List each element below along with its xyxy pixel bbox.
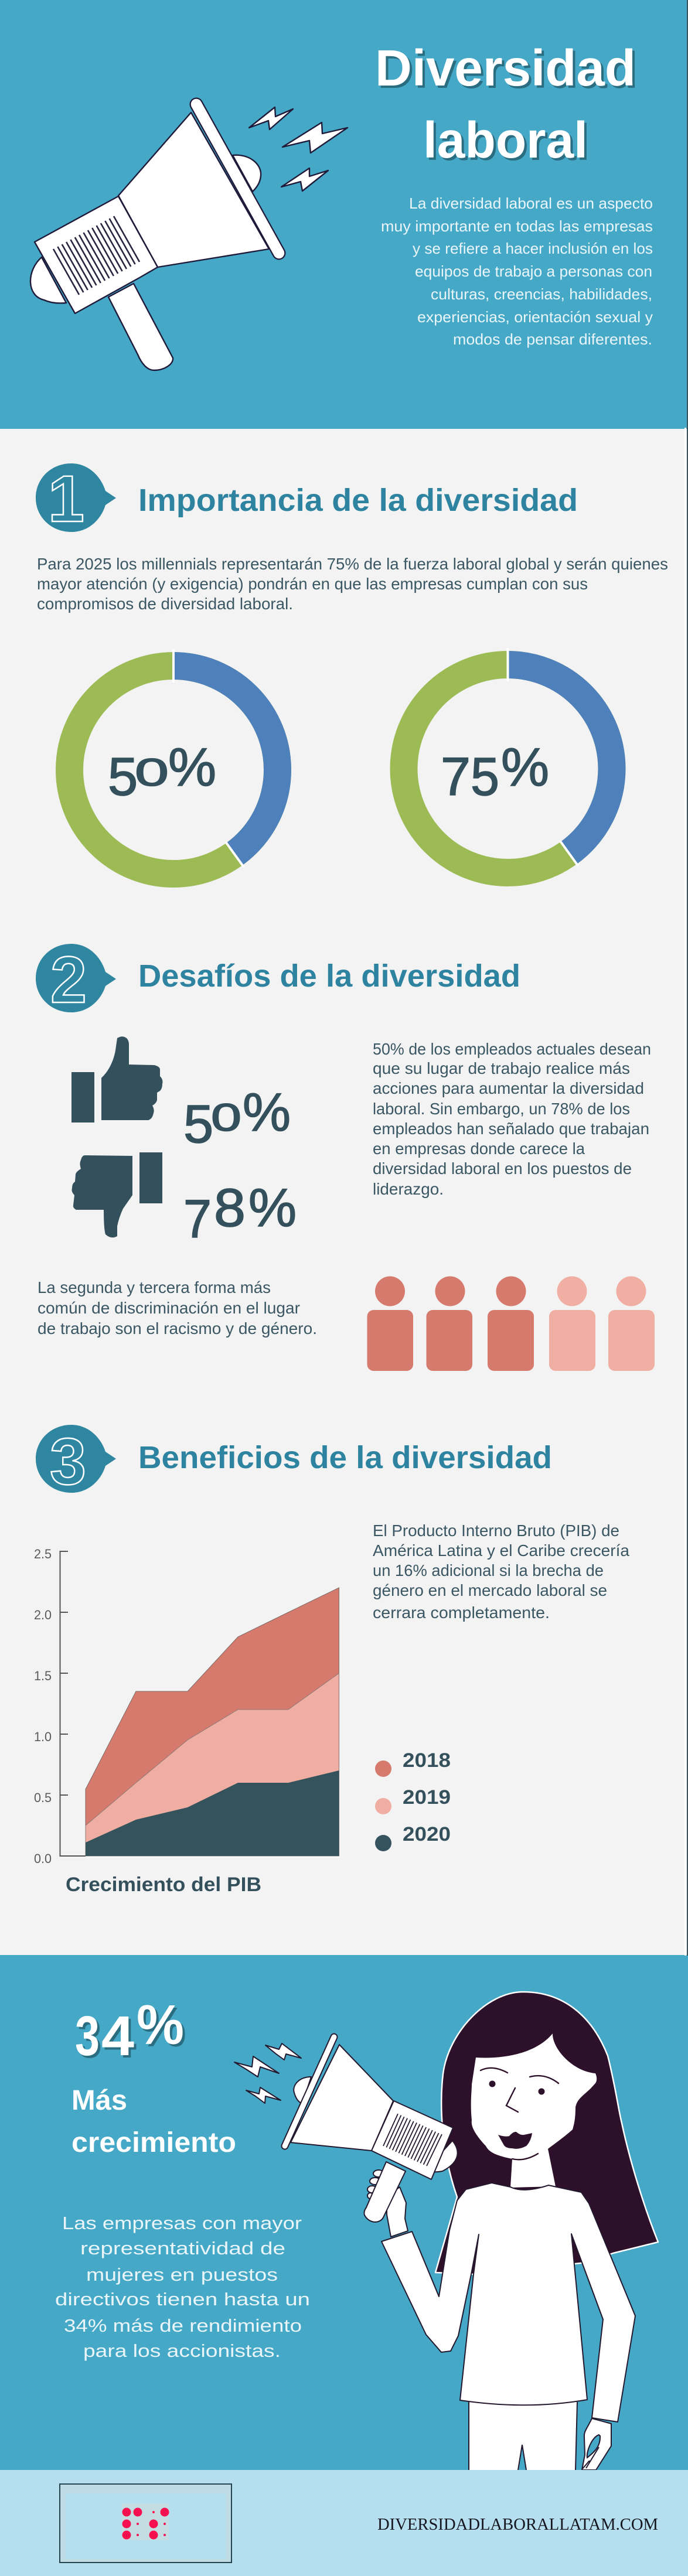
section 1: importancia bbox=[36, 462, 668, 874]
text block: género en el mercado laboral se bbox=[373, 1581, 607, 1599]
text block: América Latina y el Caribe crecería bbox=[373, 1541, 629, 1560]
chart: donut 50%: 5 bbox=[108, 747, 138, 807]
text block: representatividad de bbox=[80, 2238, 285, 2258]
face bbox=[471, 2033, 597, 2188]
heading: Importancia de la diversidad bbox=[138, 483, 578, 518]
heading: Desafíos de la diversidad bbox=[138, 958, 520, 994]
text block: empleados han señalado que trabajan bbox=[373, 1120, 649, 1138]
chart: donut 50%: % bbox=[168, 738, 216, 797]
chart: donut 75%: 7 bbox=[441, 747, 471, 807]
chart: area growth: 0.5 bbox=[34, 1790, 52, 1805]
icon: thumbs up bbox=[71, 1036, 163, 1122]
icon: number 2 bubble bbox=[36, 943, 116, 1016]
icon: thumbs down bbox=[71, 1152, 162, 1237]
text block: La segunda y tercera forma más bbox=[38, 1278, 271, 1296]
text block bbox=[373, 1521, 629, 1622]
text block bbox=[37, 555, 668, 613]
chart: donut 75% bbox=[404, 648, 612, 873]
text block bbox=[373, 1040, 651, 1198]
page background bbox=[0, 429, 688, 1956]
text block bbox=[55, 2213, 310, 2361]
text block: directivos tienen hasta un bbox=[55, 2289, 310, 2309]
subtitle bbox=[71, 2085, 236, 2158]
legend: 2018 bbox=[403, 1749, 451, 1772]
icon: number 1 bubble bbox=[36, 462, 116, 535]
icon: number 3 bubble: 3 bbox=[50, 1425, 86, 1498]
intro text: experiencias, orientación sexual y bbox=[417, 308, 653, 326]
icon: number 1 bubble: 1 bbox=[48, 462, 84, 535]
text block: diversidad laboral en los puestos de bbox=[373, 1159, 632, 1178]
section 3: beneficios bbox=[34, 1425, 629, 1896]
text block: mujeres en puestos bbox=[86, 2264, 278, 2285]
panel: closing bbox=[0, 1955, 688, 2470]
chart: area growth: 0.0 bbox=[34, 1851, 52, 1866]
chart: donut 50% bbox=[69, 649, 278, 874]
text block bbox=[38, 1278, 317, 1338]
title bbox=[375, 40, 636, 169]
chart: area growth: 2.0 bbox=[34, 1608, 52, 1622]
chart: donut 50%: 0 bbox=[135, 750, 169, 794]
text block: de trabajo son el racismo y de género. bbox=[38, 1319, 317, 1338]
megaphone bbox=[234, 2037, 458, 2179]
intro text bbox=[381, 195, 653, 348]
section 2: desafios bbox=[36, 943, 655, 1371]
logo dots bbox=[122, 2503, 169, 2540]
face details bbox=[481, 2068, 558, 2159]
stat: 34%: % bbox=[137, 1994, 184, 2056]
logo box bbox=[60, 2484, 231, 2563]
legend: 2019 bbox=[403, 1786, 451, 1809]
text block: Las empresas con mayor bbox=[62, 2213, 302, 2233]
text block: liderazgo. bbox=[373, 1180, 444, 1198]
chart: donut 75%: 5 bbox=[471, 747, 499, 807]
text block: acciones para aumentar la diversidad bbox=[373, 1079, 644, 1097]
intro text: y se refiere a hacer inclusión en los bbox=[413, 240, 653, 257]
stat: 34%: 3 bbox=[75, 2005, 100, 2067]
text block: para los accionistas. bbox=[83, 2340, 281, 2361]
heading: Beneficios de la diversidad bbox=[138, 1440, 552, 1475]
torso and arms bbox=[382, 2183, 635, 2422]
handle bbox=[364, 2162, 406, 2222]
intro text: muy importante en todas las empresas bbox=[381, 217, 653, 235]
intro text: culturas, creencias, habilidades, bbox=[431, 285, 652, 303]
text block: laboral. Sin embargo, un 78% de los bbox=[373, 1100, 630, 1118]
chart: area growth: 1.0 bbox=[34, 1729, 52, 1744]
stat: 50%: 5 bbox=[183, 1094, 213, 1154]
chart caption: Crecimiento del PIB bbox=[66, 1874, 261, 1896]
text block: común de discriminación en el lugar bbox=[38, 1299, 300, 1317]
chart: area growth bbox=[34, 1547, 340, 1866]
chart: area growth: 1.5 bbox=[34, 1669, 52, 1683]
legend: 2020 bbox=[403, 1823, 451, 1845]
text block: mayor atención (y exigencia) pondrán en que las empresas cumplan con sus bbox=[37, 575, 588, 593]
intro text: modos de pensar diferentes. bbox=[453, 330, 652, 348]
stat: 78%: 7 bbox=[183, 1189, 212, 1249]
stat: 78%: 8 bbox=[214, 1178, 246, 1238]
title: Diversidad bbox=[375, 40, 636, 97]
left hand bbox=[387, 2187, 408, 2237]
text block: El Producto Interno Bruto (PIB) de bbox=[373, 1521, 619, 1540]
icon: number 3 bubble bbox=[36, 1425, 116, 1498]
title: laboral bbox=[423, 112, 588, 169]
icon: number 2 bubble: 2 bbox=[50, 943, 87, 1016]
stat: 34%: 4 bbox=[101, 2005, 134, 2067]
text block: compromisos de diversidad laboral. bbox=[37, 595, 293, 613]
text block: 50% de los empleados actuales desean bbox=[373, 1040, 651, 1058]
stat: 78%: % bbox=[248, 1178, 297, 1238]
intro text: La diversidad laboral es un aspecto bbox=[409, 195, 653, 212]
stat: 50%: 0 bbox=[211, 1096, 241, 1139]
legs bbox=[469, 2402, 577, 2470]
legend bbox=[375, 1749, 451, 1851]
pictogram: people bbox=[367, 1276, 655, 1371]
right hand bbox=[582, 2418, 611, 2470]
fingers bbox=[367, 2170, 384, 2199]
subtitle: Más bbox=[71, 2085, 127, 2116]
text block: cerrara completamente. bbox=[373, 1603, 550, 1622]
icon: megaphone bbox=[30, 104, 348, 370]
panel: header bbox=[0, 0, 688, 429]
intro text: equipos de trabajo a personas con bbox=[415, 262, 652, 280]
stat: 50%: % bbox=[243, 1083, 291, 1142]
text block: que su lugar de trabajo realice más bbox=[373, 1059, 630, 1077]
text block: un 16% adicional si la brecha de bbox=[373, 1561, 604, 1579]
subtitle: crecimiento bbox=[71, 2127, 236, 2158]
text block: en empresas donde carece la bbox=[373, 1139, 585, 1158]
hair bbox=[435, 1992, 658, 2274]
website: DIVERSIDADLABORALLATAM.COM bbox=[377, 2515, 658, 2534]
illustration: woman with megaphone bbox=[234, 1992, 658, 2470]
chart: donut 75%: % bbox=[501, 738, 549, 797]
text block: 34% más de rendimiento bbox=[64, 2315, 302, 2336]
chart: area growth: 2.5 bbox=[34, 1547, 52, 1561]
footer bbox=[0, 2470, 688, 2576]
text block: Para 2025 los millennials representarán 75% de la fuerza laboral global y serán quienes bbox=[37, 555, 668, 573]
